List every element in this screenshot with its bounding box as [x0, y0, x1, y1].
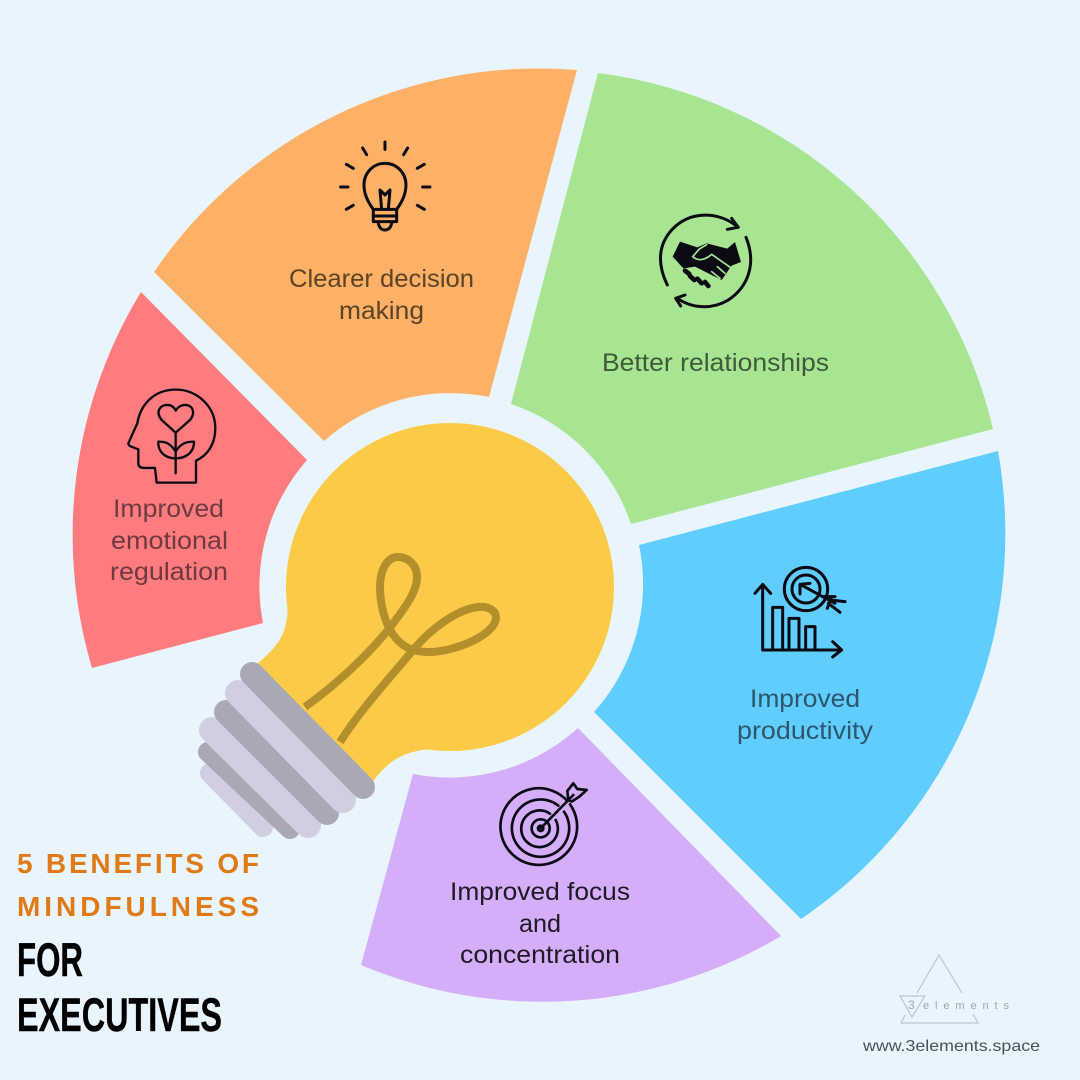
title line: for executives: FOR	[17, 933, 83, 986]
label: improved focus and concentration: and	[519, 910, 561, 938]
icon: chart with target	[755, 567, 845, 657]
icon: handshake with circular arrows	[660, 215, 751, 307]
website url: www.3elements.space	[862, 1038, 1040, 1055]
logo: 3elements	[900, 955, 1010, 1023]
title line: for executives: EXECUTIVES	[17, 988, 222, 1041]
bulb screw base	[208, 674, 363, 829]
title line: 5 benefits of mindfulness: MINDFULNESS	[17, 891, 259, 922]
label: clearer decision making: making	[339, 297, 424, 325]
logo: 3elements: 3	[908, 998, 915, 1012]
bulb filament	[305, 557, 496, 742]
title line: 5 benefits of mindfulness: 5 BENEFITS OF	[17, 848, 259, 879]
panel: improved focus and concentration	[361, 728, 781, 1002]
panel: improved emotional regulation	[73, 292, 307, 668]
icon: head with heart plant	[128, 390, 215, 483]
label: improved emotional regulation: regulation	[110, 558, 228, 586]
icon: dartboard	[500, 783, 587, 865]
label: improved focus and concentration: concentration	[460, 941, 620, 969]
label: improved emotional regulation: Improved	[113, 495, 224, 523]
central light bulb	[208, 423, 614, 829]
panel: clearer decision making	[154, 68, 577, 441]
label: improved emotional regulation: emotional	[111, 527, 228, 555]
title	[17, 848, 259, 1041]
label: clearer decision making: Clearer decision	[289, 265, 474, 293]
panel: better relationships	[511, 73, 993, 524]
logo: 3elements: elements	[923, 1000, 1010, 1012]
panel: improved productivity	[594, 451, 1005, 919]
icon: light bulb with rays	[341, 142, 430, 230]
label: improved productivity: Improved	[750, 685, 860, 713]
label: improved focus and concentration: Improved focus	[450, 878, 630, 906]
label: improved productivity: productivity	[737, 717, 874, 745]
label: better relationships: Better relationships	[602, 349, 829, 377]
